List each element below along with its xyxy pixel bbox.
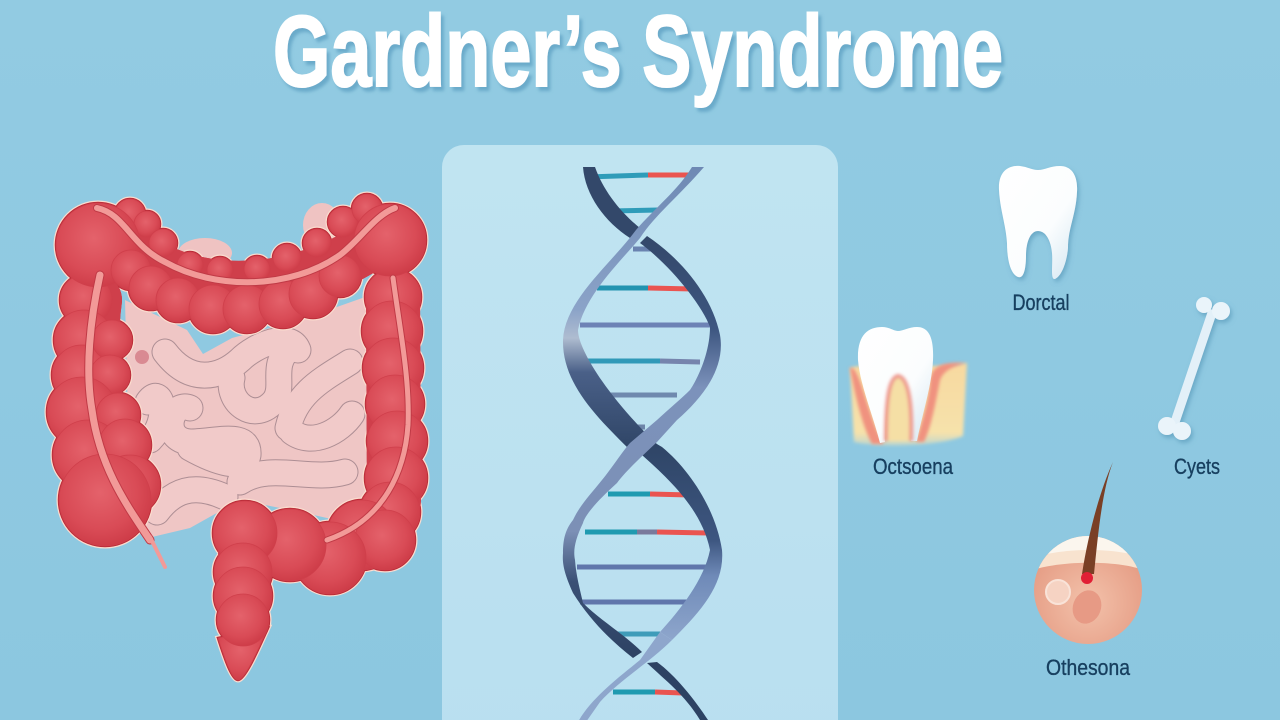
illustration: large intestine and small intestine xyxy=(47,194,427,680)
icon: tooth in gum xyxy=(850,327,967,445)
hair xyxy=(1082,462,1113,574)
follicle xyxy=(1081,572,1093,584)
tooth crown and roots xyxy=(858,327,933,443)
colon bands xyxy=(89,208,408,567)
label: Cyets: Cyets xyxy=(1174,454,1220,479)
panel: DNA background xyxy=(442,145,838,720)
label: Dorctal: Dorctal xyxy=(1012,290,1070,315)
skin disc xyxy=(1034,536,1142,644)
root pulp xyxy=(886,376,911,441)
cyst xyxy=(1068,586,1106,628)
icon: skin cross-section with hair and cysts xyxy=(1030,462,1146,649)
gum inflammation xyxy=(850,363,966,444)
icon: bone xyxy=(1158,297,1230,440)
icon: dental tooth xyxy=(999,166,1077,279)
label: Octsoena: Octsoena xyxy=(873,454,954,479)
cyst xyxy=(1046,580,1070,604)
DNA strand: front segments xyxy=(563,236,721,720)
gum xyxy=(850,363,967,445)
small intestine xyxy=(125,203,372,537)
DNA rungs xyxy=(577,175,710,693)
label: Othesona: Othesona xyxy=(1046,655,1131,680)
illustration: DNA double helix xyxy=(563,167,722,720)
large intestine xyxy=(47,194,427,680)
DNA strand: back segments xyxy=(563,167,722,720)
